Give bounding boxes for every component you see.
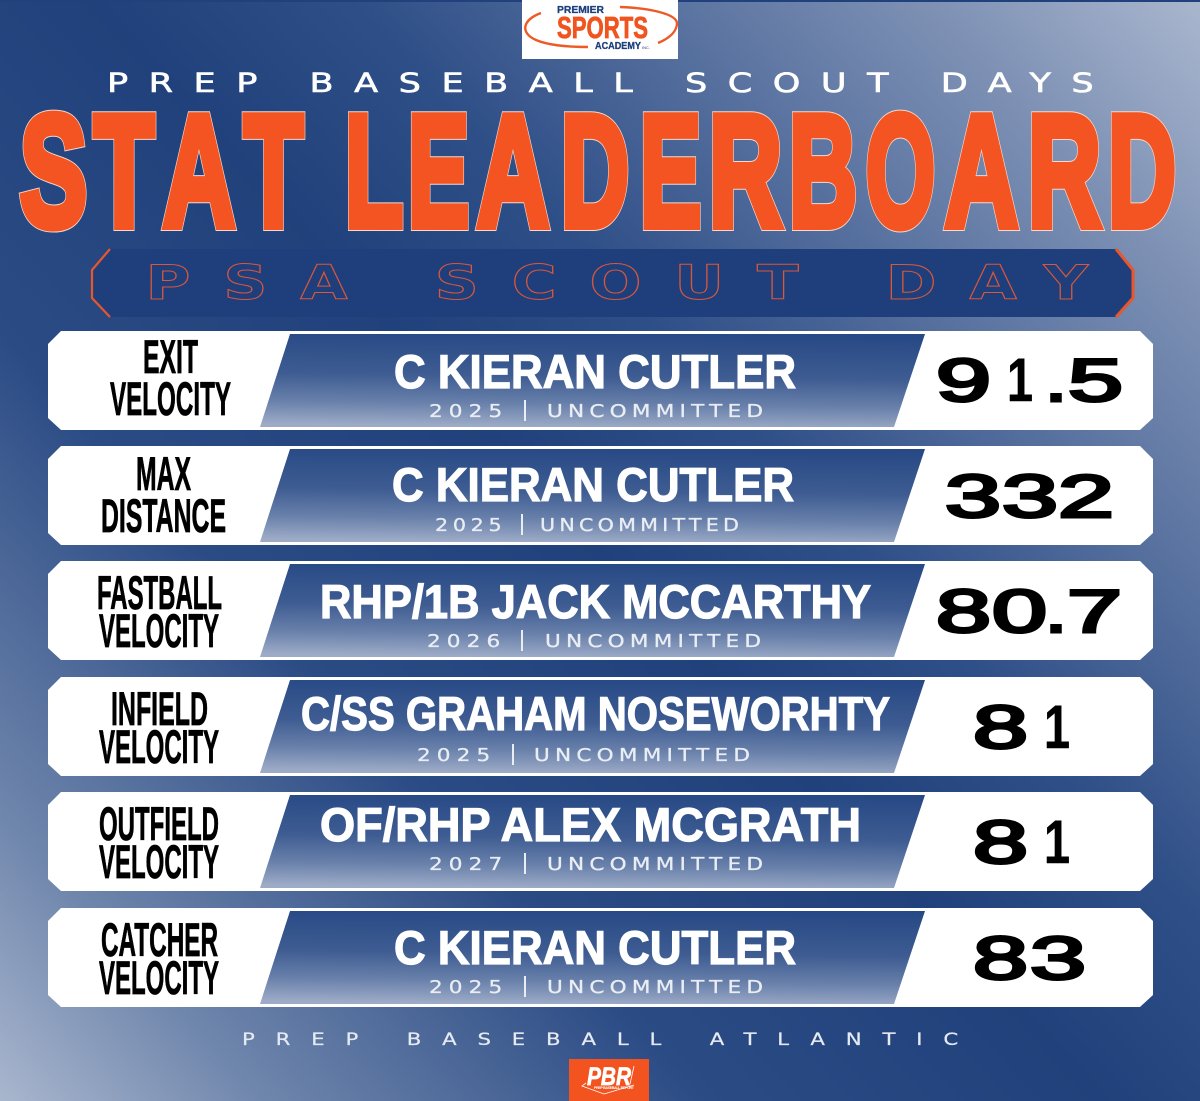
row: Max Distance	[48, 446, 1153, 545]
player name: OF/RHP ALEX MCGRATH	[320, 798, 861, 851]
row: Exit Velocity	[48, 330, 1153, 430]
banner text: PSA SCOUT DAY	[146, 255, 1089, 310]
stat value: 8	[973, 925, 1028, 992]
category label: EXIT	[143, 330, 198, 383]
player name: C KIERAN CUTLER	[394, 921, 796, 974]
class and commitment: UNCOMMITTED	[534, 745, 750, 766]
stat value	[936, 578, 1122, 645]
title: Stat Leaderboard: T	[94, 84, 154, 260]
stat value: 1	[1007, 346, 1033, 414]
title: Stat Leaderboard: R	[709, 84, 782, 260]
title: Stat Leaderboard: A	[477, 84, 549, 260]
class and commitment: UNCOMMITTED	[540, 514, 739, 536]
category label: VELOCITY	[99, 604, 219, 657]
class and commitment: 2027	[429, 854, 502, 875]
logo: PBR: PBR	[587, 1063, 631, 1091]
stat value: 3	[945, 463, 1001, 530]
title: Stat Leaderboard: E	[640, 84, 701, 260]
right orange bracket	[1116, 249, 1133, 317]
stat value: 3	[1002, 463, 1058, 530]
title: Stat Leaderboard: A	[163, 84, 235, 260]
title: Stat Leaderboard: T	[94, 84, 154, 260]
title: Stat Leaderboard: E	[408, 84, 469, 260]
title: Stat Leaderboard: S	[20, 84, 87, 260]
category label: CATCHER	[101, 913, 218, 966]
title: Stat Leaderboard: R	[1028, 84, 1101, 260]
footer text: PREP BASEBALL ATLANTIC	[242, 1029, 958, 1049]
title: Stat Leaderboard: A	[945, 84, 1018, 260]
stat value: 9	[936, 347, 991, 414]
stat value	[936, 346, 1123, 414]
class and commitment: 2025	[435, 514, 502, 536]
row: Fastball Velocity	[48, 561, 1153, 660]
title: Stat Leaderboard: T	[244, 84, 303, 260]
class and commitment	[435, 514, 739, 536]
title: Stat Leaderboard: S	[20, 84, 87, 260]
class and commitment: UNCOMMITTED	[547, 401, 763, 422]
player name: RHP/1B JACK MCCARTHY	[320, 575, 871, 628]
class and commitment	[429, 400, 763, 422]
class and commitment	[427, 630, 761, 652]
stat value: 2	[1058, 463, 1114, 530]
title: Stat Leaderboard: E	[408, 84, 469, 260]
logo: Premier Sports Academy: PREMIER	[557, 4, 604, 16]
stat value: 1	[1044, 808, 1070, 876]
title: Stat Leaderboard: T	[244, 84, 303, 260]
logo: PBR: PREP BASEBALL REPORT	[594, 1086, 635, 1090]
class and commitment: 2025	[417, 745, 490, 766]
title: Stat Leaderboard: L	[345, 84, 403, 260]
title: Stat Leaderboard: R	[1028, 84, 1101, 260]
class and commitment	[429, 976, 763, 998]
title: Stat Leaderboard: E	[640, 84, 701, 260]
stat value: 8	[973, 694, 1028, 761]
category label	[110, 330, 231, 425]
stat value: 8	[973, 809, 1028, 876]
stat value	[973, 693, 1070, 761]
category label: MAX	[136, 447, 191, 500]
title: Stat Leaderboard: A	[163, 84, 235, 260]
class and commitment: 2026	[427, 631, 500, 652]
class and commitment	[429, 853, 763, 875]
class and commitment: UNCOMMITTED	[545, 631, 761, 652]
class and commitment	[417, 744, 750, 766]
title: Stat Leaderboard: B	[789, 84, 857, 260]
category label: FASTBALL	[97, 566, 222, 619]
logo: Premier Sports Academy: SPORTS	[557, 10, 648, 45]
class and commitment: 2025	[429, 401, 502, 422]
title: Stat Leaderboard: D	[561, 84, 629, 260]
title: Stat Leaderboard: L	[345, 84, 403, 260]
category label	[97, 566, 222, 657]
class and commitment: 2025	[429, 977, 502, 998]
left orange bracket	[92, 249, 110, 317]
stat value: 0	[992, 578, 1047, 645]
logo: Premier Sports Academy: ACADEMY	[595, 41, 641, 52]
class and commitment: UNCOMMITTED	[547, 977, 763, 998]
stat value: .	[1045, 578, 1067, 645]
title: Stat Leaderboard: R	[709, 84, 782, 260]
title: Stat Leaderboard	[20, 84, 1176, 260]
stat value: 8	[936, 578, 991, 645]
category label: VELOCITY	[99, 951, 219, 1004]
title: Stat Leaderboard: A	[945, 84, 1018, 260]
row: Catcher Velocity	[48, 908, 1153, 1007]
player name: C KIERAN CUTLER	[392, 458, 794, 511]
logo: PBR	[569, 1059, 649, 1101]
stat value: 7	[1067, 578, 1122, 645]
stat value: .	[1045, 347, 1067, 414]
category label	[99, 797, 219, 888]
category label: VELOCITY	[110, 372, 231, 425]
class and commitment: UNCOMMITTED	[547, 854, 763, 875]
header: Prep Baseball Scout Days: PREP BASEBALL SCOUT DAYS	[107, 68, 1094, 99]
title: Stat Leaderboard: A	[477, 84, 549, 260]
stat value: 5	[1068, 347, 1123, 414]
stat value	[973, 925, 1086, 992]
logo: Premier Sports Academy	[522, 0, 678, 59]
category label: DISTANCE	[101, 489, 226, 542]
title: Stat Leaderboard: D	[561, 84, 629, 260]
title: Stat Leaderboard: B	[789, 84, 857, 260]
stat value	[945, 463, 1114, 530]
player name: C KIERAN CUTLER	[394, 345, 796, 398]
category label	[99, 682, 219, 773]
category label	[99, 913, 219, 1004]
stat value: 1	[1044, 693, 1070, 761]
category label: INFIELD	[111, 682, 208, 735]
category label: VELOCITY	[99, 835, 219, 888]
banner: PSA Scout Day	[92, 249, 1133, 317]
category label	[101, 447, 226, 542]
title: Stat Leaderboard: O	[866, 84, 935, 260]
stat value	[973, 808, 1070, 876]
row: Infield Velocity	[48, 677, 1153, 776]
row: Outfield Velocity	[48, 792, 1153, 891]
category label: VELOCITY	[99, 720, 219, 773]
stat value: 3	[1030, 925, 1086, 992]
title: Stat Leaderboard: O	[866, 84, 935, 260]
logo: Premier Sports Academy: INC.	[642, 45, 650, 50]
category label: OUTFIELD	[99, 797, 219, 850]
player name: C/SS GRAHAM NOSEWORHTY	[301, 687, 890, 740]
